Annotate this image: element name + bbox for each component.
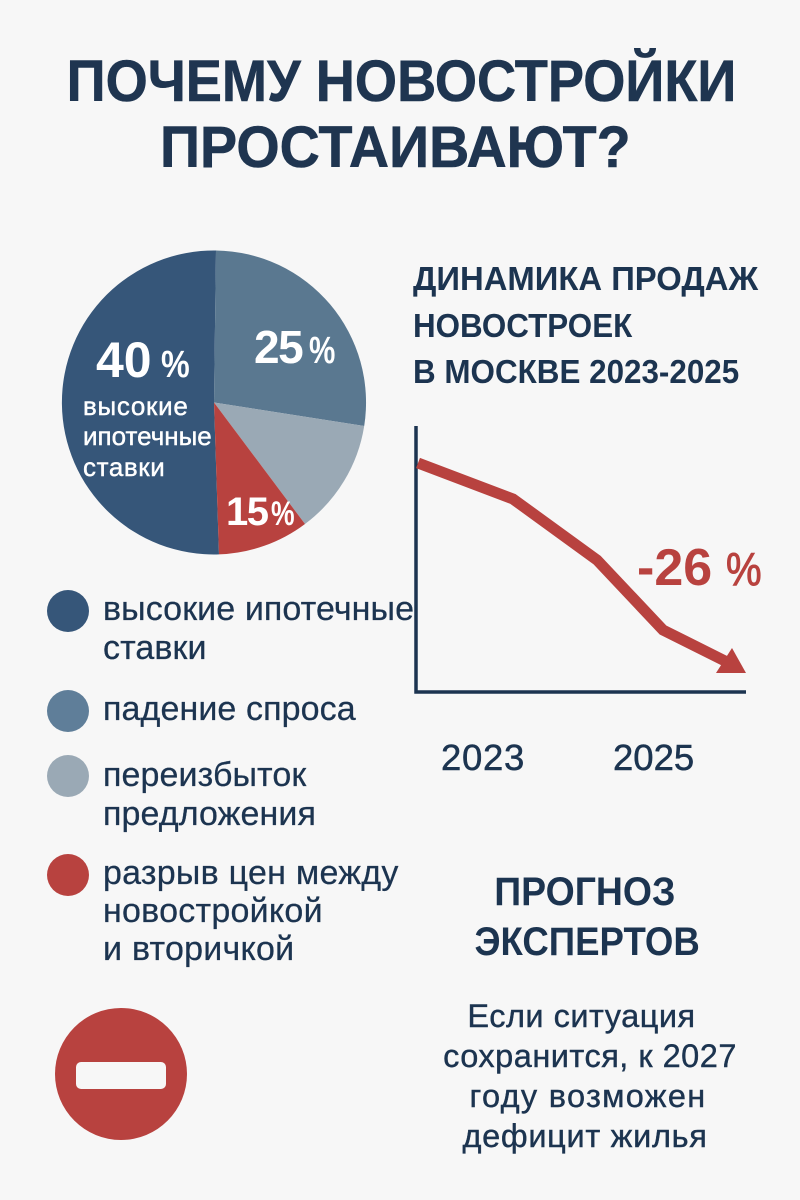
axis label 2023: 2023 <box>441 737 525 778</box>
axes <box>416 426 746 692</box>
forecast text: Если ситуация <box>467 998 696 1034</box>
title <box>67 48 736 180</box>
pie label 25% <box>254 321 335 373</box>
pie slice: oversupply <box>214 402 364 524</box>
pie slice: price gap 15% <box>214 402 305 554</box>
legend text: oversupply: предложения <box>103 795 316 833</box>
legend marker: oversupply <box>47 755 89 797</box>
legend text: mortgage rates <box>103 590 414 666</box>
legend text: oversupply <box>103 756 316 833</box>
title: ПОЧЕМУ НОВОСТРОЙКИ <box>67 49 736 114</box>
pie caption: высокие <box>83 391 189 421</box>
pie caption: ипотечные <box>83 421 212 451</box>
legend marker: mortgage rates <box>47 590 89 632</box>
legend text: demand: падение спроса <box>103 690 356 728</box>
legend text: price gap: новостройкой <box>103 892 323 930</box>
legend text: oversupply: переизбыток <box>103 756 306 794</box>
pie label 15%: 15 <box>226 490 269 534</box>
forecast heading <box>474 870 700 964</box>
legend text: mortgage rates: ставки <box>103 628 207 666</box>
forecast text: сохранится, к 2027 <box>443 1038 737 1074</box>
pie label 15%: % <box>271 495 295 533</box>
line chart <box>414 426 762 778</box>
forecast text <box>443 998 737 1154</box>
icon: no entry <box>55 1008 187 1140</box>
change label <box>637 539 762 597</box>
legend marker: price gap <box>47 854 89 896</box>
legend <box>47 590 414 968</box>
pie label 40%: % <box>161 344 190 386</box>
forecast heading: ЭКСПЕРТОВ <box>474 920 700 964</box>
pie caption: ставки <box>83 452 165 482</box>
legend text: price gap: и вторичкой <box>103 930 294 968</box>
chart heading: ДИНАМИКА ПРОДАЖ <box>413 261 758 298</box>
pie slice: high mortgage rates 40% <box>62 250 219 554</box>
pie label 25%: 25 <box>254 321 303 373</box>
arrow head <box>716 648 746 673</box>
pie label 25%: % <box>309 330 335 372</box>
forecast text: дефицит жилья <box>462 1118 708 1154</box>
sales line <box>418 463 727 662</box>
change label: % <box>726 544 762 596</box>
pie chart <box>62 250 366 554</box>
forecast text: году возможен <box>470 1078 706 1114</box>
change label: -26 <box>637 539 712 597</box>
title: ПРОСТАИВАЮТ? <box>160 115 630 180</box>
forecast heading: ПРОГНОЗ <box>494 870 676 914</box>
chart heading <box>413 261 758 391</box>
pie label 40% <box>96 332 190 388</box>
legend marker: demand <box>47 690 89 732</box>
chart heading: В МОСКВЕ 2023-2025 <box>413 354 739 391</box>
legend text: mortgage rates: высокие ипотечные <box>103 590 414 628</box>
axis label 2025: 2025 <box>613 737 694 778</box>
pie label 40%: 40 <box>96 332 152 388</box>
chart heading: НОВОСТРОЕК <box>413 308 632 344</box>
legend text: price gap: разрыв цен между <box>103 854 399 892</box>
legend text: price gap <box>103 854 399 968</box>
pie label 15% <box>226 490 295 534</box>
pie slice: falling demand 25% <box>214 250 366 426</box>
